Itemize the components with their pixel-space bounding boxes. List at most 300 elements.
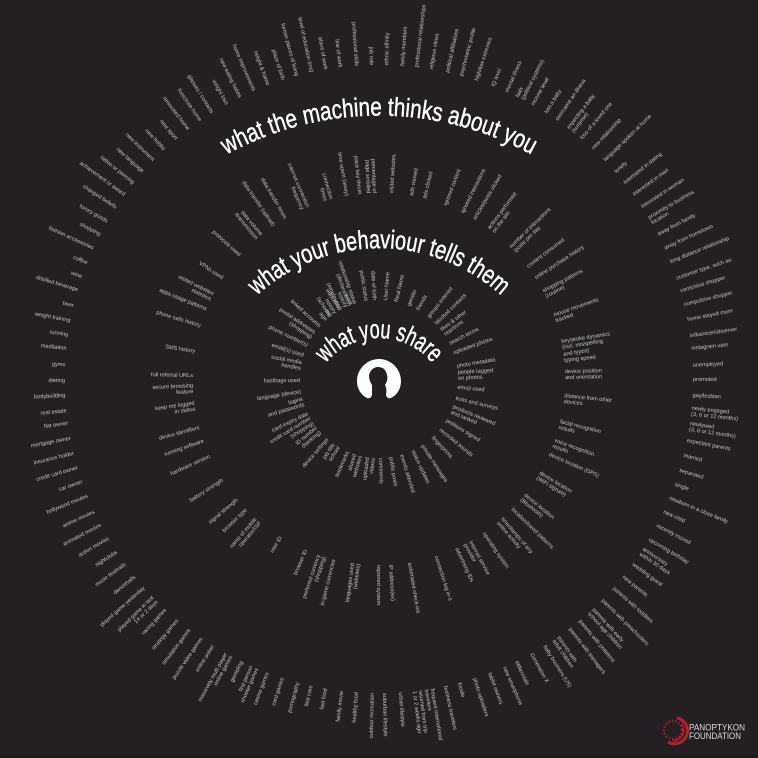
outer labels: beliefs and life events: new relationship bbox=[591, 118, 623, 151]
outer labels: habits and consumption bbox=[33, 119, 179, 368]
outer labels: games: played game yesterday bbox=[99, 585, 147, 628]
middle labels: system and identifiers: Internet service bbox=[467, 540, 491, 576]
outer labels: interests, distance and shopper type: unemployed bbox=[693, 361, 723, 369]
middle labels: device input and location: and orientation bbox=[565, 374, 602, 381]
outer labels: home, body and work: foreclose home bbox=[176, 88, 202, 123]
inner labels: profile and content, right side: User Name bbox=[383, 272, 391, 301]
outer labels: interests, distance and shopper type: proximity to business bbox=[647, 189, 696, 221]
logo wordmark: PANOPTYKON bbox=[689, 722, 745, 732]
middle labels: system and identifiers: battery strength bbox=[189, 478, 225, 504]
outer labels: habits and consumption: new sport bbox=[158, 119, 179, 142]
outer labels: beliefs and life events: professional relationships bbox=[414, 4, 428, 68]
title: what you share: what you share bbox=[315, 324, 440, 362]
outer labels: beliefs and life events: overcame an illness bbox=[555, 78, 588, 122]
outer labels: beliefs and life events: family members bbox=[400, 26, 409, 66]
middle labels: online activity: ads viewed bbox=[409, 168, 420, 196]
inner labels: profile and content, right side: blocked contacts bbox=[434, 293, 468, 326]
inner labels: profile and content, right side: gender bbox=[406, 289, 419, 307]
middle labels: browsing and connections: connection bbox=[320, 173, 333, 200]
inner labels: accounts and credentials, left side: (employers) bbox=[325, 282, 343, 311]
middle labels: browsing and connections: phone calls history bbox=[155, 310, 202, 329]
outer labels: entertainment and ownership: bodybuilding bbox=[34, 393, 66, 400]
middle labels: device input and location: location/travel patterns bbox=[510, 507, 555, 551]
inner labels: profile and content, right side: public posts bbox=[387, 457, 398, 487]
middle labels: online activity: shopping patterns bbox=[542, 268, 584, 294]
outer labels: family and relationship status: parents with preteens bbox=[577, 619, 616, 664]
middle labels: device input and location: timestamps of any bbox=[500, 517, 534, 555]
inner labels: accounts and credentials, left side: device settings bbox=[301, 437, 330, 469]
outer labels: home, body and work: place of work bbox=[317, 37, 328, 70]
outer labels: generation and lifestyle: foodie bbox=[456, 682, 466, 698]
outer labels: home, body and work: new eating habits bbox=[218, 57, 242, 99]
middle labels: online activity: ignored interactions bbox=[460, 168, 487, 214]
outer labels: games: online games bbox=[213, 655, 234, 687]
inner labels: accounts and credentials, left side: linked accounts bbox=[289, 299, 322, 329]
outer labels: beliefs and life events: loss of a loved one bbox=[579, 101, 614, 141]
outer labels: family and relationship status: newlywed bbox=[689, 421, 715, 431]
outer labels: home, body and work: place of birth bbox=[270, 49, 285, 81]
outer labels: interests, distance and shopper type: influencer/observer bbox=[690, 327, 738, 339]
outer labels: games: racing games bbox=[141, 608, 168, 636]
outer labels: entertainment and ownership: credit card owner bbox=[36, 465, 79, 483]
outer labels: family and relationship status: (3, 6 or 12 months) bbox=[688, 427, 736, 440]
inner labels: profile and content, right side: comments bbox=[377, 458, 384, 484]
inner labels: profile and content, right side: tests and surveys bbox=[455, 396, 499, 412]
middle labels: device input and location bbox=[495, 297, 613, 559]
outer labels: interests, distance and shopper type: away from family bbox=[657, 213, 697, 238]
middle labels: device input and location: voice recognition bbox=[553, 438, 595, 458]
outer labels: home, body and work: level of education (ms) bbox=[296, 17, 314, 73]
inner labels: accounts and credentials, left side: bio bbox=[323, 309, 333, 319]
middle labels: online activity: number of interactions bbox=[509, 207, 553, 250]
outer labels: interests, distance and shopper type: interested in dating bbox=[623, 152, 663, 186]
outer labels: habits and consumption: achievement or award bbox=[78, 160, 126, 198]
outer labels: family and relationship status: new parents bbox=[621, 575, 648, 599]
outer labels: entertainment and ownership: dancehalls bbox=[113, 574, 137, 596]
inner labels: accounts and credentials, left side: school bbox=[328, 446, 342, 463]
outer labels: games: online poker bbox=[195, 644, 216, 673]
middle labels: system and identifiers: browser type bbox=[222, 507, 249, 534]
inner labels: profile and content, right side: likes & other bbox=[440, 310, 468, 333]
outer labels: generation and lifestyle bbox=[287, 645, 572, 742]
middle labels: browsing and connections: feature bbox=[176, 389, 194, 396]
outer labels: beliefs and life events: income level bbox=[530, 77, 551, 107]
inner labels: profile and content, right side: friends bbox=[416, 294, 429, 312]
outer labels: games: strategy games bbox=[151, 618, 180, 651]
middle labels: system and identifiers: in-game currencies bbox=[320, 559, 337, 606]
outer labels: habits and consumption: new language bbox=[115, 147, 145, 174]
middle labels: browsing and connections bbox=[151, 152, 377, 418]
outer labels: beliefs and life events: psychometric profile bbox=[459, 27, 478, 77]
outer labels: habits and consumption: new hobby bbox=[143, 128, 166, 152]
inner labels: profile and content, right side: emoji used bbox=[457, 385, 485, 393]
outer labels: home, body and work: line of work bbox=[333, 39, 343, 68]
middle labels: system and identifiers bbox=[159, 425, 510, 614]
inner labels: profile and content, right side: people tagged bbox=[458, 368, 493, 376]
outer labels: habits and consumption: shopping bbox=[78, 222, 101, 238]
outer labels: interests, distance and shopper type: location bbox=[650, 211, 670, 226]
inner labels: accounts and credentials, left side: handles bbox=[281, 363, 301, 372]
middle labels: browsing and connections: SMS history bbox=[165, 344, 196, 355]
outer labels: home, body and work: height & frame bbox=[252, 50, 270, 86]
middle labels: device input and location: distance from other bbox=[564, 393, 612, 404]
middle labels: system and identifiers: preferred currency bbox=[302, 554, 322, 599]
middle labels: device input and location: (WiFi signals) bbox=[535, 476, 567, 498]
outer labels: habits and consumption: beer bbox=[62, 301, 74, 309]
inner labels: accounts and credentials, left side: history bbox=[323, 298, 337, 315]
outer labels: beliefs and life events: (surprise) bbox=[571, 112, 590, 134]
outer labels: generation and lifestyle: baby boomers (US) bbox=[542, 645, 572, 689]
outer labels: beliefs and life events: high/low extremes bbox=[474, 37, 494, 82]
inner labels: accounts and credentials, left side: card expiry date bbox=[271, 411, 309, 434]
middle labels: browsing and connections: pace key-thrust bbox=[352, 156, 362, 195]
outer labels: games: massively multi player bbox=[198, 652, 229, 703]
outer labels: generation and lifestyle: fast food bbox=[319, 688, 329, 710]
middle labels: browsing and connections: VPNs used bbox=[197, 261, 224, 281]
outer labels: family and relationship status bbox=[551, 406, 739, 676]
middle labels: browsing and connections: secure browsing bbox=[152, 383, 193, 391]
outer labels: generation and lifestyle: fast cars bbox=[304, 685, 314, 707]
inner labels: profile and content, right side: groups entered bbox=[426, 286, 454, 319]
outer labels: family and relationship status: separated bbox=[678, 468, 704, 481]
inner labels: accounts and credentials, left side: and passwords bbox=[267, 402, 305, 419]
outer labels: games: 14 or 2 days bbox=[133, 599, 160, 625]
inner labels: profile and content, right side: private messages bbox=[419, 444, 449, 484]
middle labels: device input and location: facial recognition bbox=[559, 419, 601, 435]
middle labels: system and identifiers: (websites) bbox=[353, 563, 362, 590]
outer labels: entertainment and ownership: car owner bbox=[58, 479, 84, 493]
middle labels: device input and location: results bbox=[558, 425, 575, 435]
inner labels: accounts and credentials, left side bbox=[257, 260, 377, 481]
outer labels: family and relationship status: newly engaged bbox=[691, 406, 729, 416]
outer labels: generation and lifestyle: Millennials bbox=[513, 660, 530, 687]
middle labels: system and identifiers: device identifiers bbox=[159, 425, 201, 442]
outer labels: generation and lifestyle: healthy food bbox=[352, 692, 360, 723]
logo wordmark: FOUNDATION bbox=[689, 731, 741, 741]
inner labels: accounts and credentials, left side: email(s) used bbox=[271, 343, 304, 359]
middle labels: browsing and connections: Internet connection bbox=[286, 162, 310, 209]
outer labels: family and relationship status: upcoming birthday bbox=[647, 537, 690, 566]
middle labels: system and identifiers: provider bbox=[462, 543, 477, 564]
middle labels: system and identifiers: user ID bbox=[269, 536, 284, 554]
outer labels: interests, distance and shopper type: away from hometown bbox=[663, 224, 714, 251]
outer labels: family and relationship status: parents with toddlers bbox=[611, 586, 654, 625]
title: what the machine thinks about you: what the machine thinks about you bbox=[220, 96, 537, 154]
middle labels: browsing and connections: data transfer times bbox=[259, 177, 288, 220]
outer labels: entertainment and ownership: dieting bbox=[49, 378, 65, 384]
outer labels: family and relationship status: (3, 6 or 12 months) bbox=[691, 412, 738, 422]
middle labels: device input and location: devices bbox=[563, 399, 583, 407]
outer labels: beliefs and life events: faith bbox=[515, 87, 525, 99]
outer labels: beliefs and life events: religious views bbox=[429, 33, 441, 70]
inner labels: accounts and credentials, left side: uploaded bbox=[362, 457, 371, 480]
middle labels: online activity: actions performed bbox=[487, 191, 518, 231]
outer labels: games: casino games bbox=[253, 671, 271, 706]
outer labels: entertainment and ownership: anime movies bbox=[62, 509, 96, 529]
inner labels: profile and content, right side: petitions signed bbox=[445, 418, 481, 443]
outer labels: generation and lifestyle: outdoor recreation bbox=[369, 693, 376, 738]
outer labels: home, body and work: renovated home bbox=[161, 96, 190, 132]
middle labels: online activity: (routine) bbox=[545, 285, 566, 300]
middle labels: browsing and connections: visited websites bbox=[177, 274, 215, 297]
outer labels: home, body and work: former places of living bbox=[279, 23, 299, 77]
logo wordmark bbox=[689, 722, 745, 741]
middle labels: online activity: on the site bbox=[491, 210, 512, 234]
outer labels: entertainment and ownership: music festivals bbox=[94, 562, 127, 588]
middle labels: device input and location: device location (GPS) bbox=[548, 452, 600, 479]
outer labels: entertainment and ownership: action movies bbox=[78, 536, 110, 559]
inner labels: profile and content, right side: status updates bbox=[410, 449, 431, 485]
outer labels: games: shooter games bbox=[240, 667, 260, 704]
middle labels: online activity: ignored content bbox=[443, 168, 463, 207]
inner labels: accounts and credentials, left side: websites bbox=[352, 455, 364, 479]
outer labels: generation and lifestyle: family movie bbox=[336, 690, 345, 722]
inner labels: accounts and credentials, left side: relationship status bbox=[336, 260, 357, 305]
middle labels: system and identifiers: operating system bbox=[481, 531, 510, 570]
outer labels: home, body and work: weight loss bbox=[210, 78, 229, 106]
middle labels: device input and location: mouse movements bbox=[553, 297, 600, 318]
middle labels: device input and location: device position bbox=[565, 368, 602, 375]
middle labels: browsing and connections: data transfer (upload) bbox=[240, 180, 276, 228]
outer labels: generation and lifestyle: travelers bbox=[423, 689, 432, 711]
inner labels: accounts and credentials, left side: work bbox=[343, 292, 353, 307]
middle labels: system and identifiers: advertising IDs bbox=[453, 547, 474, 583]
outer labels: interests, distance and shopper type: compulsive shopper bbox=[683, 290, 733, 308]
middle labels: system and identifiers: IP address(es) bbox=[387, 564, 395, 601]
outer labels: generation and lifestyle: photo uploaders bbox=[471, 677, 489, 718]
inner labels: accounts and credentials, left side: public status bbox=[358, 270, 369, 302]
inner labels: accounts and credentials, left side: job title bbox=[321, 442, 337, 461]
inner labels: profile and content, right side: search terms bbox=[448, 327, 480, 347]
middle labels: online activity: online purchase history bbox=[534, 245, 586, 281]
outer labels: games: card games bbox=[271, 677, 286, 707]
outer labels: family and relationship status: parents with teenagers bbox=[567, 627, 606, 676]
inner labels: accounts and credentials, left side: bookmarks bbox=[334, 450, 351, 478]
outer labels: interests, distance and shopper type: conscious shopper bbox=[680, 275, 726, 294]
inner labels: accounts and credentials, left side: age bbox=[318, 311, 328, 322]
middle labels: system and identifiers: reported system bbox=[375, 565, 381, 605]
outer labels: family and relationship status: wedding guest bbox=[630, 561, 664, 588]
outer labels: habits and consumption: meditation bbox=[40, 343, 67, 352]
middle labels: system and identifiers: signal strength bbox=[208, 498, 240, 526]
middle labels: browsing and connections: /transmission bbox=[233, 212, 259, 241]
outer labels: beliefs and life events: mental illness bbox=[504, 60, 524, 94]
middle labels: system and identifiers: running software bbox=[164, 439, 205, 458]
logo: Panoptykon Foundation bbox=[664, 718, 745, 744]
outer labels: beliefs and life events: lonely bbox=[614, 160, 629, 175]
middle labels: browsing and connections: full referral URLs bbox=[151, 372, 193, 379]
middle labels: device input and location: and typos) bbox=[563, 348, 590, 358]
middle labels: browsing and connections: times bbox=[318, 187, 328, 202]
outer labels: family and relationship status: school age children bbox=[586, 611, 623, 651]
outer labels: interests, distance and shopper type: gay/lesbian bbox=[692, 393, 721, 400]
inner labels: accounts and credentials, left side: education bbox=[324, 288, 342, 312]
outer labels: habits and consumption: running bbox=[49, 330, 68, 338]
middle labels: system and identifiers: (shopping) bbox=[314, 556, 328, 583]
inner labels: accounts and credentials, left side: shared bbox=[348, 454, 358, 472]
inner labels: accounts and credentials, left side: postal addresses bbox=[278, 307, 316, 336]
middle labels: online activity: visited websites bbox=[389, 154, 398, 194]
middle labels: browsing and connections: apps usage patterns bbox=[158, 288, 208, 312]
middle labels: browsing and connections: protocols used bbox=[211, 229, 242, 258]
inner labels: accounts and credentials, left side: credit card number bbox=[269, 416, 312, 445]
middle labels: system and identifiers: automated check-ins bbox=[406, 562, 421, 614]
inner labels: profile and content, right side: recorded sounds bbox=[438, 427, 474, 458]
inner labels: profile and content, right side: uploaded photos bbox=[453, 336, 494, 356]
title: what your behaviour tells them: what your behaviour tells them bbox=[248, 230, 508, 295]
icon: person silhouette in a horseshoe bbox=[357, 359, 401, 398]
outer labels: beliefs and life events: IQ level bbox=[491, 68, 503, 88]
inner labels: accounts and credentials, left side: language (device) bbox=[257, 389, 302, 402]
inner labels: accounts and credentials, left side: (declarations) bbox=[335, 273, 352, 307]
inner labels: accounts and credentials, left side: videos bbox=[369, 457, 377, 474]
outer labels: generation and lifestyle: frequent international bbox=[429, 688, 443, 741]
inner labels: accounts and credentials, left side: (banking) bbox=[301, 430, 323, 450]
outer labels: games: puzzle video games bbox=[171, 636, 205, 681]
inner labels: accounts and credentials, left side: (shopping) bbox=[290, 421, 315, 440]
outer labels: habits and consumption: wine bbox=[69, 270, 83, 280]
middle labels: system and identifiers: hardware version bbox=[170, 454, 211, 477]
inner ring: what you share bbox=[257, 260, 499, 494]
outer labels: entertainment and ownership: flat owner bbox=[44, 421, 69, 430]
middle labels: device input and location: results bbox=[551, 444, 569, 455]
outer labels: family and relationship status: parents with early bbox=[590, 607, 625, 644]
outer labels: family and relationship status: newborn in a close family bbox=[668, 496, 729, 525]
outer labels: entertainment and ownership: nightclubs bbox=[94, 550, 119, 569]
outer labels: family and relationship status: parents with preschoolers bbox=[600, 598, 650, 647]
outer labels: beliefs and life events: expecting a baby bbox=[566, 93, 597, 130]
inner labels: profile and content, right side: reactions bbox=[443, 319, 465, 338]
inner labels: profile and content, right side: events attended bbox=[398, 454, 416, 494]
outer labels: family and relationship status: anniversary bbox=[641, 547, 669, 568]
outer labels: generation and lifestyle: 1 or 2 weeks ago bbox=[411, 691, 422, 734]
outer labels: beliefs and life events: lost a baby bbox=[544, 89, 563, 115]
inner labels: profile and content, right side: photo metadata bbox=[457, 357, 497, 370]
middle labels: device input and location: device location bbox=[523, 493, 555, 521]
outer labels: games: first person bbox=[238, 665, 255, 693]
outer labels: generation and lifestyle: pornography bbox=[287, 681, 301, 714]
outer labels: home, body and work bbox=[161, 17, 374, 132]
middle labels: browsing and connections: statistics bbox=[190, 288, 212, 303]
inner labels: accounts and credentials, left side: (schools) bbox=[315, 296, 332, 319]
middle labels: browsing and connections: data volume bbox=[239, 210, 263, 237]
middle labels: device input and location: keystroke dynamics bbox=[561, 331, 611, 345]
middle labels: device input and location: tracked bbox=[555, 312, 574, 324]
inner labels: accounts and credentials, left side: history bbox=[336, 291, 348, 309]
outer labels: habits and consumption: new instrument bbox=[124, 132, 156, 163]
outer labels: family and relationship status: adult children bbox=[551, 639, 574, 670]
middle labels: system and identifiers: browser ID bbox=[293, 549, 309, 576]
outer labels: beliefs and life events: (political systems) bbox=[520, 59, 546, 101]
outer labels: home, body and work: professional skills bbox=[350, 22, 359, 66]
outer labels: games: played game in last bbox=[117, 595, 156, 633]
middle labels: online activity bbox=[389, 154, 587, 300]
middle labels: device input and location: device location bbox=[538, 471, 573, 495]
inner labels: profile and content, right side: products reviewed bbox=[452, 404, 496, 427]
inner labels: accounts and credentials, left side: logins bbox=[288, 396, 304, 406]
outer labels: entertainment and ownership: animated movies bbox=[62, 523, 103, 548]
middle labels: browsing and connections: keep me logged bbox=[155, 401, 195, 412]
outer labels: family and relationship status: parents with bbox=[556, 635, 578, 664]
outer labels: generation and lifestyle: tablet owners bbox=[486, 672, 504, 705]
middle labels: browsing and connections: time spent (away) bbox=[336, 152, 349, 197]
middle labels: device input and location: online activity bbox=[495, 521, 522, 550]
outer labels: interests, distance and shopper type: home stayed mom bbox=[687, 308, 733, 323]
outer labels: generation and lifestyle: new smartphone bbox=[501, 666, 523, 706]
outer labels: entertainment and ownership bbox=[30, 378, 137, 596]
outer labels: games: gambling bbox=[230, 660, 245, 683]
outer labels: habits and consumption: tattoo or piercing bbox=[99, 155, 135, 186]
outer labels: entertainment and ownership: bollywood movies bbox=[46, 494, 89, 516]
outer labels: generation and lifestyle: Generation X bbox=[528, 652, 550, 684]
outer labels: interests, distance and shopper type: promoted bbox=[693, 377, 717, 383]
outer labels: habits and consumption: luxury goods bbox=[78, 203, 109, 225]
inner labels: profile and content, right side: fingerprints bbox=[430, 435, 453, 460]
middle labels: browsing and connections: page scrolled bbox=[364, 160, 371, 193]
outer labels: generation and lifestyle: suburban lifestyle bbox=[381, 693, 388, 737]
middle labels: browsing and connections: percentage of bbox=[370, 159, 377, 194]
outer labels: home, body and work: home improvements bbox=[230, 44, 256, 93]
inner labels: accounts and credentials, left side: social media bbox=[270, 355, 303, 366]
outer labels: family and relationship status: expectant parents bbox=[686, 438, 731, 453]
middle labels: online activity: content consumed bbox=[526, 237, 566, 270]
outer labels: beliefs and life events: political affiliations bbox=[445, 28, 461, 73]
inner labels: profile and content, right side: Real Name bbox=[394, 274, 406, 303]
middle labels: system and identifiers: languages used bbox=[345, 563, 356, 603]
inner labels: accounts and credentials, left side: phone number(s) bbox=[268, 325, 309, 349]
outer labels: entertainment and ownership: insurance holder bbox=[33, 451, 75, 466]
outer labels: habits and consumption: coffee bbox=[72, 255, 88, 266]
outer labels: games bbox=[99, 585, 286, 707]
outer labels: beliefs and life events bbox=[384, 4, 653, 175]
outer labels: beliefs and life events: ethnic affinity bbox=[384, 32, 391, 65]
inner labels: accounts and credentials, left side: (shopping) bbox=[288, 321, 313, 341]
outer labels: beliefs and life events: language spoken at home bbox=[603, 114, 653, 163]
outer labels: interests, distance and shopper type: interested in woman bbox=[640, 177, 685, 210]
outer labels: habits and consumption: weight training bbox=[33, 311, 71, 324]
middle labels: device input and location: typing speed bbox=[564, 355, 596, 364]
middle labels: device input and location: (incl. misspelling bbox=[562, 339, 603, 351]
outer labels: home, body and work: job role bbox=[367, 46, 374, 65]
outer labels: interests, distance and shopper type: customer type, such as: bbox=[676, 257, 734, 282]
middle labels: online activity: /posts per day bbox=[513, 225, 542, 254]
outer labels: habits and consumption: fashion accessories bbox=[47, 225, 95, 252]
outer labels: interests, distance and shopper type: interested in man bbox=[632, 168, 670, 198]
outer labels: entertainment and ownership: real estate bbox=[40, 408, 67, 417]
middle labels: device input and location: (Bluetooth) bbox=[519, 497, 544, 519]
middle ring: what your behaviour tells them bbox=[151, 152, 613, 614]
inner labels: profile and content, right side: and ranked bbox=[449, 410, 478, 426]
outer labels: games: simulation games bbox=[161, 628, 192, 666]
outer labels: interests, distance and shopper type: instagram user bbox=[691, 342, 729, 352]
inner labels: accounts and credentials, left side: date of birth bbox=[369, 270, 377, 300]
outer labels: home, body and work: glasses / contacts bbox=[186, 74, 214, 115]
middle labels: online activity: articles/posts clicked bbox=[472, 174, 504, 221]
outer labels: family and relationship status: recently moved bbox=[655, 523, 692, 546]
outer labels: family and relationship status: new child bbox=[662, 509, 686, 525]
outer labels: habits and consumption: gyms bbox=[52, 362, 66, 368]
outer labels: interests, distance and shopper type: long distance relationship bbox=[669, 236, 730, 265]
outer labels: generation and lifestyle: urban lifestyle bbox=[397, 692, 405, 727]
outer labels: interests, distance and shopper type bbox=[623, 152, 738, 400]
middle labels: browsing and connections: in status bbox=[174, 406, 196, 415]
outer labels: habits and consumption: changed beliefs bbox=[81, 184, 118, 211]
logo icon: red toothed ring bbox=[664, 718, 688, 744]
outer labels: entertainment and ownership: mortgage owner bbox=[30, 436, 71, 449]
outer labels: generation and lifestyle: returned from trip bbox=[417, 690, 428, 733]
inner labels: accounts and credentials, left side: ID number bbox=[295, 425, 319, 447]
outer labels: family and relationship status: married bbox=[683, 453, 703, 463]
